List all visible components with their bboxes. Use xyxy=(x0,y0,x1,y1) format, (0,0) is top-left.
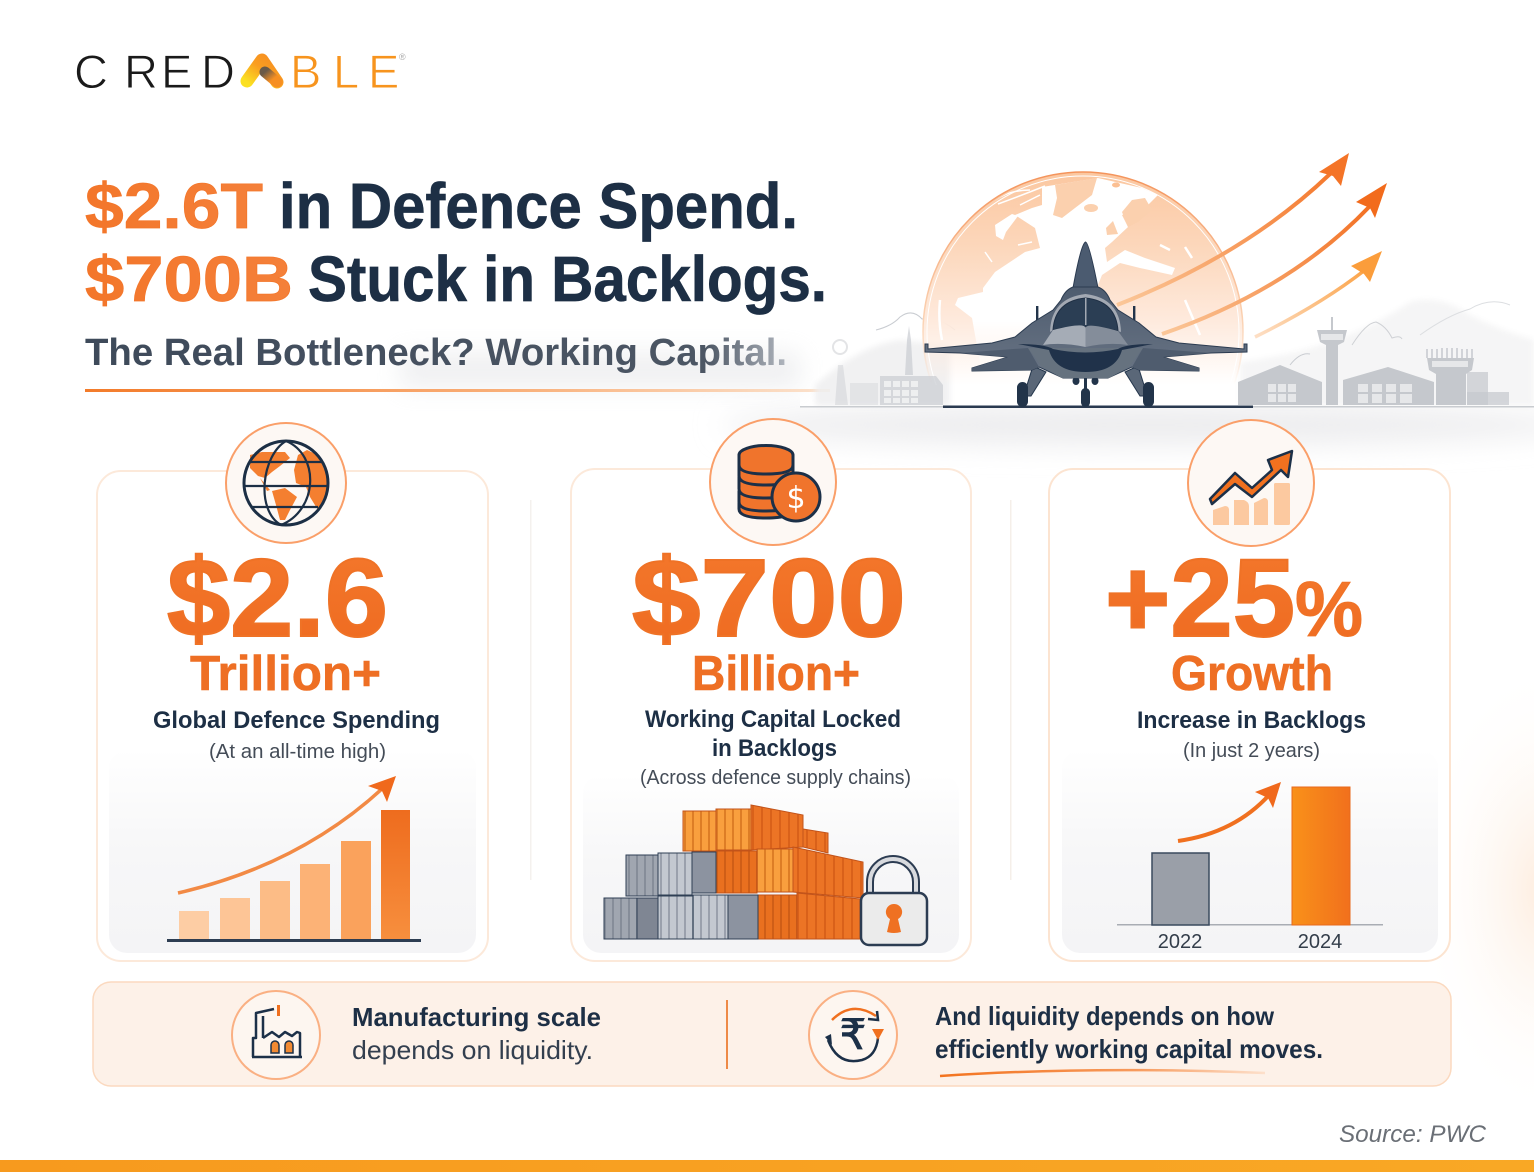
text: working capital moves: efficiently working capital moves. xyxy=(935,1034,1323,1064)
hero illustration: globe, jet, arrows, airport skyline xyxy=(800,153,1534,408)
stat: +25% growth: % xyxy=(1295,565,1363,653)
stat: +25% growth: +25 xyxy=(1105,537,1295,660)
text: manufacturing scale: Manufacturing scale xyxy=(352,1002,601,1032)
icon: coin stack: $ xyxy=(786,481,806,516)
label: working capital locked in backlogs: Working Capital Locked xyxy=(645,706,901,733)
illustration: shipping containers xyxy=(604,805,863,939)
headline: The Real Bottleneck? Working Capital. xyxy=(85,332,787,374)
banner: liquidity takeaway xyxy=(93,982,1451,1086)
label: working capital locked in backlogs: in Backlogs xyxy=(712,735,837,762)
arrow: growth 2 xyxy=(1162,183,1387,334)
bar chart: 2022 vs 2024: 2024 xyxy=(1298,931,1342,953)
headline: in Defence Spend. xyxy=(279,170,798,242)
label: global defence spending: Global Defence Spending xyxy=(153,707,440,734)
label: working capital locked in backlogs: (Across defence supply chains) xyxy=(640,767,911,789)
label: working capital locked in backlogs xyxy=(640,706,911,789)
skyline: mountains and clouds xyxy=(815,300,1534,406)
text: working capital moves: And liquidity depends on how xyxy=(935,1001,1275,1031)
fighter jet xyxy=(925,242,1247,407)
label: increase in backlogs: (In just 2 years) xyxy=(1183,740,1320,762)
globe xyxy=(922,171,1244,380)
divider strokes xyxy=(530,500,532,880)
headline xyxy=(85,170,830,392)
stat: $700 billion+ xyxy=(632,537,906,701)
icon: globe xyxy=(226,423,346,543)
stat: $2.6 trillion+: $2.6 xyxy=(167,537,388,660)
bar chart: 2022 vs 2024 xyxy=(1117,782,1383,953)
headline: Stuck in Backlogs. xyxy=(308,243,827,315)
stat: $700 billion+: Billion+ xyxy=(692,647,860,701)
text: working capital moves xyxy=(935,1001,1323,1076)
headline: $700B xyxy=(85,243,293,315)
icon: factory xyxy=(232,991,320,1079)
source note: Source: PWC xyxy=(1339,1121,1487,1148)
panel: global defence spending xyxy=(97,423,488,961)
arrow: growth 3 xyxy=(1255,251,1382,337)
bar chart: 2022 vs 2024: 2022 xyxy=(1158,931,1202,953)
bar chart: rising spending xyxy=(167,776,421,942)
logo: Credable xyxy=(74,45,406,98)
arrow: growth 1 xyxy=(1117,153,1349,305)
panel: backlog growth xyxy=(1049,420,1450,961)
label: global defence spending: (At an all-time high) xyxy=(209,741,386,763)
runway xyxy=(800,406,1534,408)
stat: $2.6 trillion+: Trillion+ xyxy=(190,647,381,701)
skyline: left buildings xyxy=(833,326,943,405)
text: manufacturing scale: depends on liquidity. xyxy=(352,1035,593,1065)
headline: $2.6T xyxy=(85,170,263,242)
icon: coin stack xyxy=(710,419,836,545)
logo: Credable: ® xyxy=(399,52,406,62)
icon: rupee cycle xyxy=(809,991,897,1079)
text: manufacturing scale xyxy=(352,1002,601,1065)
icon: rupee cycle: ₹ xyxy=(840,1010,866,1059)
stat: $700 billion+: $700 xyxy=(632,537,906,660)
logo: Credable: CRED xyxy=(74,45,235,98)
logo: Credable: BLE xyxy=(290,45,399,98)
panel: working capital locked xyxy=(571,419,971,961)
footer bar xyxy=(0,1160,1534,1172)
stat: +25% growth xyxy=(1105,537,1363,701)
stat: +25% growth: Growth xyxy=(1171,647,1333,701)
label: global defence spending xyxy=(153,707,440,763)
icon: growth chart xyxy=(1188,420,1314,546)
icon: padlock xyxy=(861,859,927,945)
label: increase in backlogs xyxy=(1137,707,1366,762)
label: increase in backlogs: Increase in Backlogs xyxy=(1137,707,1366,734)
skyline: right hangars and control towers xyxy=(1238,317,1509,405)
